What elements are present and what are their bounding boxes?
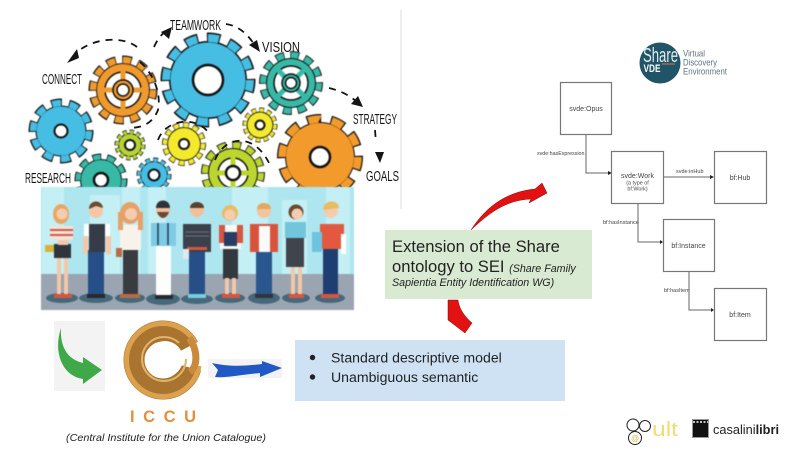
person 4 [146, 200, 180, 305]
icon: Share VDE logo [640, 42, 727, 84]
connectors [586, 134, 714, 312]
icon: green curved arrow [54, 321, 105, 391]
icon: CULT logo: ult [652, 419, 679, 441]
logo text: Virtual [683, 48, 705, 60]
caption: Central Institute: (Central Institute for the Union Catalogue) [66, 432, 266, 444]
box: bf:Hub: bf:Hub [730, 175, 750, 182]
box: bf:Item [714, 288, 766, 340]
person 8 [282, 204, 310, 303]
icon: CULT logo: @ [631, 434, 639, 443]
panel: group of people illustration [41, 187, 354, 310]
arrow: red lower curve [448, 300, 472, 333]
panel: gears illustration [25, 17, 399, 203]
bullet 2: Unambiguous semantic [331, 369, 478, 385]
person 5 [181, 202, 213, 304]
gear: small yellow [245, 110, 275, 140]
icon: casalini libri logo: casalinilibri [713, 422, 779, 437]
person 1 [45, 204, 78, 303]
panel: benefits list [295, 340, 565, 401]
person 2 [79, 201, 113, 303]
person 6 [215, 205, 245, 303]
background buildings [42, 187, 350, 274]
icon: blue arrow [208, 359, 282, 378]
logo text [683, 48, 727, 78]
person 3 [115, 202, 145, 303]
gear: bottom teal [78, 157, 124, 203]
icon: Share VDE logo: Share [643, 45, 678, 67]
label: RESEARCH: RESEARCH [25, 170, 71, 187]
box: svde:Work: (a type of [626, 180, 649, 186]
gear: teal spoked [263, 55, 319, 111]
subtext: ontology to SEI (Share Family [392, 257, 576, 276]
gear: small bottom blue [139, 160, 169, 190]
box: bf:Instance [664, 220, 714, 272]
box: svde:Work: bf:Work) [627, 186, 648, 192]
heading text: Extension of the Share [392, 237, 560, 256]
label: TEAMWORK: TEAMWORK [170, 17, 221, 34]
panel: Share ontology extension [385, 230, 592, 299]
icon: Share VDE logo: VDE [644, 63, 660, 75]
gear: large blue [166, 38, 250, 122]
gear: lime spoked [205, 145, 261, 201]
box: bf:Item: bf:Item [729, 312, 751, 319]
box: svde:Opus: svde:Opus [569, 106, 603, 113]
ICCU wordmark: ICCU [130, 408, 196, 426]
icon: CULT logo [627, 419, 679, 444]
gear: large orange [282, 119, 358, 195]
person 9 [312, 201, 346, 303]
icon: ICCU at-sign logo [126, 324, 200, 426]
logo text: Environment [683, 66, 727, 78]
subtext line 2: Sapientia Entity Identification WG) [392, 277, 554, 289]
label: VISION: VISION [262, 39, 300, 56]
edge label: bf:hasItem: bf:hasItem [664, 288, 690, 294]
gear: orange spoked [93, 60, 153, 120]
edge label: svde:inHub: svde:inHub [676, 169, 704, 175]
bullet 1: Standard descriptive model [331, 350, 502, 366]
gear: yellow [165, 125, 203, 163]
box: svde:Work [612, 152, 664, 204]
arrow: red upward curve [471, 183, 547, 230]
dashed motion arrows [67, 24, 384, 165]
divider [400, 10, 402, 209]
label: GOALS: GOALS [366, 168, 399, 185]
box: bf:Hub [714, 152, 766, 204]
icon: casalini libri logo [692, 420, 779, 438]
box: svde:Work: svde:Work [621, 173, 654, 180]
gear: left blue [33, 103, 89, 159]
label: STRATEGY: STRATEGY [353, 111, 397, 128]
box: svde:Opus [560, 82, 612, 134]
edge label: bf:hasInstance: bf:hasInstance [603, 220, 639, 226]
diagram: ontology model [537, 82, 766, 340]
logo text: Discovery [683, 58, 717, 68]
label: CONNECT: CONNECT [42, 71, 82, 88]
box: bf:Instance: bf:Instance [671, 243, 706, 250]
edge label: svde:hasExpression: svde:hasExpression [537, 151, 584, 157]
person 7 [248, 203, 280, 304]
gear: small lime [117, 132, 143, 158]
